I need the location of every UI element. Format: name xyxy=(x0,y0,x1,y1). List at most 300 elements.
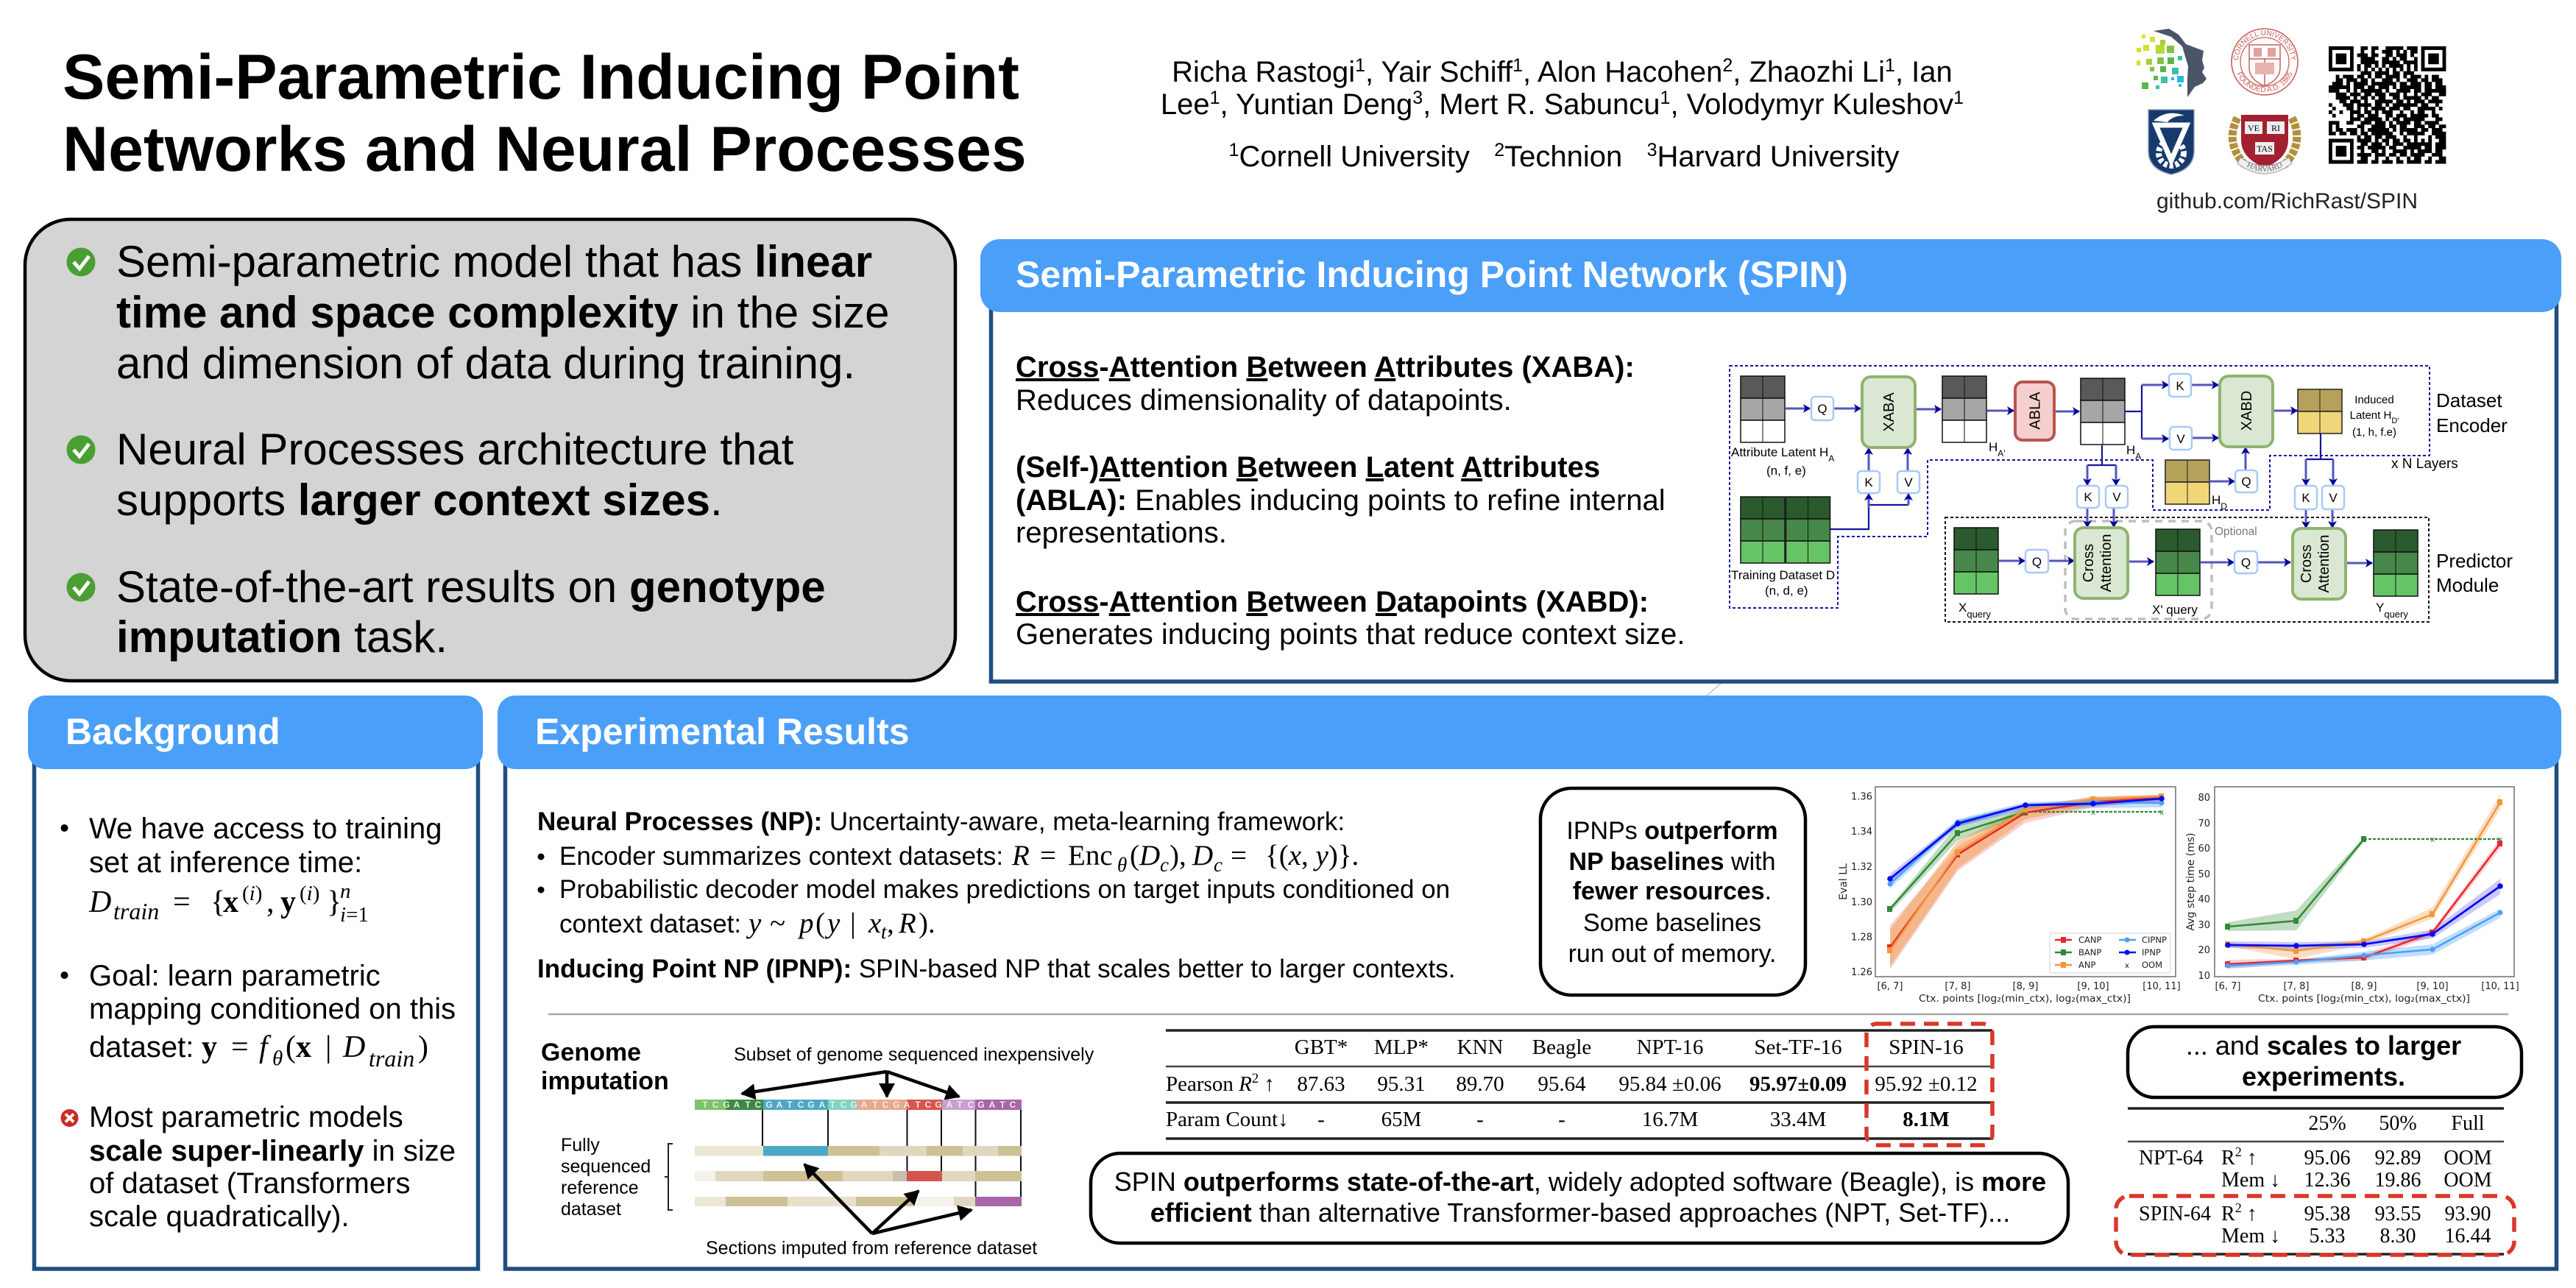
text: ABLA description: (Self-)Attention Between Latent Attributes xyxy=(1016,451,1600,484)
x axis ticks: [9, 10] xyxy=(2416,981,2449,992)
optional label: Optional xyxy=(2215,526,2257,538)
formula: encoder: Enc xyxy=(1068,840,1113,871)
axis label: y: Eval LL xyxy=(1838,863,1850,900)
label: X query: Xquery xyxy=(1958,601,1991,620)
row group: NPT-64 xyxy=(2139,1144,2492,1192)
highlight: SPIN-64 rows xyxy=(2116,1196,2514,1255)
formula: encoder: = xyxy=(1040,840,1056,871)
text: neural processes: Probabilistic decoder model makes predictions on target inputs conditioned on xyxy=(559,875,1450,904)
line: OOM xyxy=(2364,838,2500,840)
line: IPNP xyxy=(1890,799,2162,879)
x axis ticks: [7, 8] xyxy=(2284,981,2309,992)
y axis ticks: 1.28 xyxy=(1851,932,1872,944)
row: Pearson R2: Pearson R xyxy=(1166,1072,1252,1096)
text: XABD description: Generates inducing points that reduce context size. xyxy=(1016,618,1685,651)
key query value boxes: K xyxy=(2176,379,2184,393)
x axis ticks: [8, 9] xyxy=(2013,981,2038,992)
formula: encoder: ( xyxy=(1130,840,1139,871)
key query value boxes: Q xyxy=(2241,475,2251,489)
text: ABLA description: representations. xyxy=(1016,517,1227,549)
formula: dataset definition: train xyxy=(113,898,159,924)
row group: NPT-64: 12.36 xyxy=(2304,1169,2351,1192)
legend: CANP xyxy=(2078,935,2101,945)
label: dataset encoder: Encoder xyxy=(2436,414,2508,436)
block: cross attention 1: Attention xyxy=(2098,534,2115,592)
formula: decoder: R xyxy=(898,907,916,939)
repository link: github.com/RichRast/SPIN xyxy=(2156,189,2418,213)
line: CIPNP xyxy=(2228,913,2500,966)
panel: experimental results xyxy=(498,696,2561,1269)
line: CANP xyxy=(2228,843,2500,964)
bracket xyxy=(665,1144,673,1210)
legend: OOM xyxy=(2142,960,2162,970)
row group: NPT-64: 95.06 xyxy=(2304,1147,2351,1170)
block: cross attention 1: Cross xyxy=(2081,544,2097,582)
grid: Y query xyxy=(2374,530,2418,596)
architecture diagram xyxy=(1730,366,2513,622)
text: neural processes: Inducing Point NP (IPNP): SPIN-based NP that scales better to larger contexts. xyxy=(537,955,1455,983)
formula: parametric mapping: D xyxy=(342,1030,365,1064)
key query value boxes: V xyxy=(2176,432,2185,446)
text: linear complexity: time and space complexity in the size xyxy=(116,288,889,337)
key query value boxes: V xyxy=(2112,490,2121,504)
y axis ticks: 1.32 xyxy=(1851,862,1872,873)
formula: decoder: ( xyxy=(815,907,825,939)
text: XABD description: Cross-Attention Between Datapoints (XABD): xyxy=(1016,586,1649,618)
formula: decoder: y xyxy=(824,907,841,939)
logo: Harvard crest: VE xyxy=(2248,123,2260,133)
block: XABD xyxy=(2220,376,2273,447)
row: Pearson R2: 89.70 xyxy=(1456,1072,1504,1096)
reference row 2 xyxy=(695,1171,1022,1181)
band: IPNP xyxy=(2228,879,2500,949)
callout: scales to larger experiments xyxy=(2128,1027,2522,1097)
logo: Harvard crest xyxy=(2229,115,2301,174)
panel: key points xyxy=(25,219,955,681)
arrows: dataset to XABA xyxy=(1830,448,1908,529)
block: cross attention 1 xyxy=(2075,528,2128,598)
band: CANP xyxy=(1890,795,2162,969)
label: dataset encoder: Dataset xyxy=(2436,389,2502,411)
formula: decoder: ~ xyxy=(770,907,785,939)
x axis ticks xyxy=(1878,981,2181,992)
label: HA: HA xyxy=(2126,443,2141,461)
y axis ticks: 60 xyxy=(2198,843,2210,854)
formula: parametric mapping: train xyxy=(369,1045,414,1072)
formula: dataset definition: , xyxy=(266,885,274,919)
line: CIPNP xyxy=(1890,802,2162,884)
panel: SPIN xyxy=(980,239,2561,682)
row group: SPIN-64: Mem ↓ xyxy=(2221,1225,2280,1248)
key query value boxes: K xyxy=(1864,475,1873,489)
formula: decoder: p xyxy=(797,907,814,939)
text: larger contexts: supports larger context sizes. xyxy=(116,475,723,525)
formula: parametric mapping: | xyxy=(325,1030,331,1064)
y axis ticks: 10 xyxy=(2198,971,2210,982)
y axis ticks: 1.34 xyxy=(1851,827,1872,838)
row: Pearson R2 xyxy=(1166,1071,1978,1096)
callout: scales to larger experiments: ... and scales to larger xyxy=(2186,1030,2461,1061)
chart: average step time xyxy=(2185,787,2519,1005)
row: parameter count: 8.1M xyxy=(1903,1108,1950,1131)
formula: dataset definition: } xyxy=(327,885,342,919)
row group: SPIN-64: 2 xyxy=(2235,1200,2242,1215)
formula: decoder: t xyxy=(881,921,888,943)
row group: NPT-64: 19.86 xyxy=(2374,1169,2421,1192)
logo: Cornell University seal: FOUNDED A.D. 1865 xyxy=(2237,71,2292,92)
bullet: scaling problem: scale super-linearly in size xyxy=(89,1135,456,1167)
formula: parametric mapping: ) xyxy=(418,1030,428,1064)
label: reference dataset: dataset xyxy=(561,1199,621,1220)
bullet: training set xyxy=(60,813,442,927)
grid: HD xyxy=(2165,460,2209,504)
arrows: encoder chain xyxy=(1786,385,2297,439)
row group: SPIN-64: SPIN-64 xyxy=(2139,1203,2211,1225)
title: Semi-Parametric Inducing Point xyxy=(63,42,1019,113)
formula: encoder: D xyxy=(1139,840,1160,871)
key query value boxes: Q xyxy=(1817,402,1827,416)
band: ANP xyxy=(2228,795,2500,959)
text: neural processes: Encoder summarizes context datasets: xyxy=(559,842,1003,871)
key query value boxes: Q xyxy=(2241,556,2251,570)
key query value boxes: Q xyxy=(2032,555,2042,569)
arrows: predictor chain xyxy=(1999,561,2372,563)
label: Y query: Yquery xyxy=(2376,601,2408,620)
legend: x xyxy=(2125,962,2129,970)
line: ANP xyxy=(2228,802,2500,951)
arrows: subset xyxy=(742,1072,959,1097)
grid: induced latent xyxy=(2298,389,2342,434)
chart: eval log likelihood xyxy=(1838,787,2181,1005)
label: attribute latent: (n, f, e) xyxy=(1766,464,1806,478)
grid: attribute latent xyxy=(1741,376,1785,442)
text: linear complexity: and dimension of data during training. xyxy=(116,339,855,388)
y axis ticks: 80 xyxy=(2198,793,2210,804)
label: predictor module: Module xyxy=(2436,574,2499,596)
table header: NPT-16 xyxy=(1637,1036,1703,1059)
OOM markers: x xyxy=(2430,835,2435,844)
label: x N layers: x N Layers xyxy=(2391,456,2458,472)
logo: Cornell University seal: CORNELL UNIVERSITY xyxy=(2233,30,2296,60)
text: genotype imputation: State-of-the-art results on genotype xyxy=(116,562,826,612)
label: induced latent: Induced xyxy=(2354,394,2394,406)
formula: encoder: c xyxy=(1160,854,1169,876)
callout: SPIN outperforms: efficient than alternative Transformer-based approaches (NPT, Set-TF)... xyxy=(1150,1197,2010,1228)
formula: encoder: c xyxy=(1214,854,1222,876)
block: ABLA: ABLA xyxy=(2027,392,2043,430)
callout: IPNP results: run out of memory. xyxy=(1568,940,1776,968)
legend xyxy=(2050,933,2170,973)
heading: background: Background xyxy=(66,711,280,752)
formula: dataset definition: = xyxy=(173,885,191,919)
key query value boxes: K xyxy=(2084,490,2092,504)
arrows: induced latent to second cross attention xyxy=(2306,434,2333,528)
panel: background xyxy=(28,696,483,1269)
bullet: goal: dataset: xyxy=(89,1031,194,1064)
logo: Harvard crest: TAS xyxy=(2257,144,2273,154)
callout: SPIN outperforms: SPIN outperforms state-of-the-art, widely adopted software (Beagle), is more xyxy=(1114,1167,2046,1197)
text: neural processes: Neural Processes (NP): Uncertainty-aware, meta-learning framework: xyxy=(537,807,1345,836)
legend: ANP xyxy=(2078,960,2095,970)
x axis ticks: [7, 8] xyxy=(1945,981,1970,992)
row: Pearson R2: 2 xyxy=(1252,1071,1259,1086)
row: Pearson R2: 95.31 xyxy=(1377,1072,1426,1096)
bullet: scaling problem: of dataset (Transformers xyxy=(89,1167,410,1200)
text: neural processes: context dataset: xyxy=(559,910,741,938)
row: Pearson R2: 95.64 xyxy=(1538,1072,1586,1096)
grid: X prime query xyxy=(2156,529,2200,595)
label: reference dataset: Fully xyxy=(561,1135,600,1156)
table header: SPIN-16 xyxy=(1889,1036,1964,1059)
block: XABD: XABD xyxy=(2239,391,2255,431)
formula: decoder: y xyxy=(746,907,762,939)
bullet: scaling problem: scale quadratically). xyxy=(89,1200,349,1233)
label: reference dataset: reference xyxy=(561,1178,639,1198)
heading: genome imputation: Genome xyxy=(541,1038,641,1066)
formula: decoder: ). xyxy=(919,907,935,939)
block: ABLA xyxy=(2015,382,2054,440)
row group: NPT-64: NPT-64 xyxy=(2139,1147,2204,1170)
row group: SPIN-64: 93.90 xyxy=(2445,1203,2491,1225)
key query value boxes xyxy=(1811,374,2344,573)
heading: genome imputation: imputation xyxy=(541,1067,669,1095)
row group: SPIN-64: R xyxy=(2221,1203,2235,1225)
row group: NPT-64: 92.89 xyxy=(2374,1147,2421,1170)
row: parameter count: Param Count↓ xyxy=(1166,1108,1289,1131)
line: BANP xyxy=(1890,812,2025,909)
formula: decoder: , xyxy=(887,907,894,939)
callout: IPNP results: Some baselines xyxy=(1583,909,1761,937)
grid: training dataset xyxy=(1741,497,1830,563)
table header: MLP* xyxy=(1374,1036,1429,1059)
band: CIPNP xyxy=(1890,799,2162,888)
row group: SPIN-64: 5.33 xyxy=(2310,1225,2345,1248)
band: BANP xyxy=(1890,809,2025,913)
grid: HA prime xyxy=(1942,376,1986,442)
table header: KNN xyxy=(1457,1036,1503,1059)
row group: NPT-64: 2 xyxy=(2235,1144,2242,1159)
OOM markers: x xyxy=(2091,807,2096,817)
reference row 1 xyxy=(695,1146,1022,1156)
bullet: goal: Goal: learn parametric xyxy=(89,960,381,992)
key query value boxes: V xyxy=(1904,475,1913,489)
row group: NPT-64: OOM xyxy=(2444,1169,2492,1192)
formula: encoder: = xyxy=(1231,840,1247,871)
callout: IPNP results: fewer resources. xyxy=(1573,877,1772,905)
band: IPNP xyxy=(1890,796,2162,882)
formula: parametric mapping: = xyxy=(231,1030,249,1064)
QR code xyxy=(2329,48,2446,162)
row: Pearson R2: 95.84 ±0.06 xyxy=(1618,1072,1722,1096)
formula: dataset definition: n xyxy=(340,880,350,903)
x axis ticks: [9, 10] xyxy=(2077,981,2109,992)
band: CANP xyxy=(2228,839,2500,969)
row: parameter count: - xyxy=(1558,1108,1565,1131)
arrows: HA to cross attention xyxy=(2087,445,2116,527)
OOM markers xyxy=(2091,807,2165,817)
heading: SPIN: Semi-Parametric Inducing Point Network (SPIN) xyxy=(1016,254,1848,295)
icon: check xyxy=(66,247,96,277)
grid: X query xyxy=(1954,528,1998,594)
block: XABA: XABA xyxy=(1881,392,1897,432)
legend: IPNP xyxy=(2142,947,2161,958)
formula: decoder: | xyxy=(850,907,856,939)
label: imputed sections: Sections imputed from reference dataset xyxy=(706,1238,1037,1259)
authors and affiliations: Lee1, Yuntian Deng3, Mert R. Sabuncu1, Volodymyr Kuleshov1 xyxy=(1161,88,1964,121)
band: ANP xyxy=(1890,795,2162,966)
axis label: x: Ctx. points [log₂(min_ctx), log₂(max_ctx)] xyxy=(2258,993,2470,1005)
label: HA prime: HA' xyxy=(1989,440,2006,459)
x axis ticks: [8, 9] xyxy=(2352,981,2377,992)
sequence bar: TCGATCGATCGATCGATCGATCGATCGATC xyxy=(702,1100,1016,1110)
text: ABLA description: (ABLA): Enables inducing points to refine internal xyxy=(1016,484,1666,517)
row: parameter count xyxy=(1166,1108,1950,1131)
logo: Harvard crest: RI xyxy=(2271,123,2280,133)
label: X prime query: X' query xyxy=(2152,603,2198,617)
x axis ticks: [6, 7] xyxy=(1878,981,1903,992)
row: parameter count: - xyxy=(1317,1108,1325,1131)
label: training dataset: Training Dataset D xyxy=(1731,568,1835,582)
band: CIPNP xyxy=(2228,909,2500,969)
line: IPNP xyxy=(2228,886,2500,946)
formula: dataset definition: { xyxy=(210,885,225,919)
predictor module outline xyxy=(1945,517,2429,622)
text: XABA description: Cross-Attention Between Attributes (XABA): xyxy=(1016,351,1635,383)
dataset encoder outline xyxy=(1730,366,2430,608)
x axis ticks xyxy=(2215,981,2519,992)
y axis ticks: 20 xyxy=(2198,945,2210,956)
table: genome imputation results xyxy=(1166,1030,1992,1139)
bullet: training set: set at inference time: xyxy=(89,846,362,879)
grid: HA xyxy=(2081,378,2125,445)
band: BANP xyxy=(2228,837,2364,931)
table header: Beagle xyxy=(1532,1036,1591,1059)
icon: cross xyxy=(60,1109,78,1127)
formula: dataset definition: (i) xyxy=(242,882,262,905)
callout: IPNP results xyxy=(1540,788,1805,995)
block: cross attention 2: Cross xyxy=(2299,545,2315,583)
connectors xyxy=(762,1110,1021,1197)
text: XABA description: Reduces dimensionality of datapoints. xyxy=(1016,384,1512,417)
row: Pearson R2: 95.97±0.09 xyxy=(1749,1072,1847,1096)
row group: SPIN-64: 95.38 xyxy=(2304,1203,2351,1225)
title: Networks and Neural Processes xyxy=(63,114,1027,185)
table header: 25% xyxy=(2308,1112,2346,1135)
y axis ticks: 1.36 xyxy=(1851,792,1872,802)
label: reference dataset: sequenced xyxy=(561,1156,651,1177)
icon: check xyxy=(66,436,96,464)
label: subset: Subset of genome sequenced inexpensively xyxy=(734,1044,1094,1065)
legend: CIPNP xyxy=(2142,935,2167,945)
label: induced latent: (1, h, f.e) xyxy=(2352,426,2396,439)
line: CANP xyxy=(1890,797,2162,947)
row: parameter count: - xyxy=(1476,1108,1484,1131)
row group: NPT-64: OOM xyxy=(2444,1147,2492,1170)
table header: 50% xyxy=(2379,1112,2417,1135)
table header: GBT* xyxy=(1295,1036,1348,1059)
row group: NPT-64: R xyxy=(2221,1147,2235,1170)
x axis ticks: [6, 7] xyxy=(2215,981,2240,992)
formula: encoder: R xyxy=(1011,840,1030,871)
authors and affiliations: 1Cornell University 2Technion 3Harvard University xyxy=(1229,140,1899,173)
callout: SPIN outperforms xyxy=(1091,1153,2068,1243)
row group: NPT-64: ↑ xyxy=(2242,1147,2257,1170)
axis label: y: Avg step time (ms) xyxy=(2185,832,2197,931)
formula: dataset definition: i=1 xyxy=(340,903,369,927)
block: XABA xyxy=(1862,377,1915,447)
table header: Full xyxy=(2451,1112,2485,1135)
row group: SPIN-64 xyxy=(2139,1200,2491,1248)
genome diagram xyxy=(561,1044,1094,1259)
row group: SPIN-64: 16.44 xyxy=(2445,1225,2491,1248)
row: parameter count: 65M xyxy=(1381,1108,1421,1131)
formula: parametric mapping: θ xyxy=(272,1047,283,1070)
row group: SPIN-64: 93.55 xyxy=(2374,1203,2421,1225)
row group: NPT-64: Mem ↓ xyxy=(2221,1169,2280,1192)
formula: parametric mapping: x xyxy=(296,1030,311,1064)
callout: IPNP results: NP baselines with xyxy=(1569,848,1775,876)
line: ANP xyxy=(1890,796,2162,950)
formula: parametric mapping: y xyxy=(202,1030,217,1064)
formula: encoder: θ xyxy=(1117,854,1127,876)
label: induced latent: Latent HD' xyxy=(2350,409,2399,425)
bullet: goal: mapping conditioned on this xyxy=(89,993,456,1025)
line: BANP xyxy=(2228,839,2364,927)
text: linear complexity: Semi-parametric model that has linear xyxy=(116,237,872,286)
line: OOM xyxy=(2025,811,2162,813)
y axis ticks xyxy=(1851,792,1872,978)
authors and affiliations: Richa Rastogi1, Yair Schiff1, Alon Hacohen2, Zhaozhi Li1, Ian xyxy=(1172,55,1953,88)
formula: encoder: D xyxy=(1192,840,1213,871)
stray connector line xyxy=(1676,665,1741,723)
y axis ticks: 30 xyxy=(2198,920,2210,931)
heading: experimental results: Experimental Results xyxy=(535,711,910,752)
divider xyxy=(548,1013,2508,1015)
formula: decoder: x xyxy=(868,907,882,939)
logo: Technion shield xyxy=(2148,110,2194,174)
formula: encoder: ), xyxy=(1170,840,1186,871)
label: predictor module: Predictor xyxy=(2436,550,2513,572)
row: Pearson R2: 95.92 ±0.12 xyxy=(1875,1072,1978,1096)
row group: SPIN-64: ↑ xyxy=(2242,1203,2257,1225)
row: parameter count: 16.7M xyxy=(1642,1108,1698,1131)
bullet: goal xyxy=(60,960,456,1072)
row: Pearson R2: ↑ xyxy=(1259,1072,1275,1096)
formula: encoder: {(x, y)}. xyxy=(1265,840,1359,871)
y axis ticks: 70 xyxy=(2198,818,2210,829)
y axis ticks: 50 xyxy=(2198,869,2210,880)
x axis ticks: [10, 11] xyxy=(2481,981,2519,992)
block: cross attention 2: Attention xyxy=(2316,535,2332,592)
axis label: x: Ctx. points [log₂(min_ctx), log₂(max_ctx)] xyxy=(1919,993,2131,1005)
formula: dataset definition: y xyxy=(280,885,296,919)
y axis ticks: 1.26 xyxy=(1851,967,1872,978)
y axis ticks: 40 xyxy=(2198,894,2210,905)
callout: IPNP results: IPNPs outperform xyxy=(1566,817,1778,845)
y axis ticks xyxy=(2198,793,2210,982)
optional block outline xyxy=(2065,521,2212,619)
OOM markers: x xyxy=(2498,835,2503,844)
logo: Cornell University seal xyxy=(2231,28,2299,96)
formula: dataset definition: (i) xyxy=(300,882,319,905)
row: parameter count: 33.4M xyxy=(1770,1108,1826,1131)
text: larger contexts: Neural Processes architecture that xyxy=(116,425,794,474)
formula: parametric mapping: f xyxy=(259,1030,272,1064)
logo: AI head xyxy=(2137,29,2207,97)
label: HD: HD xyxy=(2212,493,2227,512)
reference row 3 xyxy=(695,1197,1022,1206)
text: genotype imputation: imputation task. xyxy=(116,612,447,662)
